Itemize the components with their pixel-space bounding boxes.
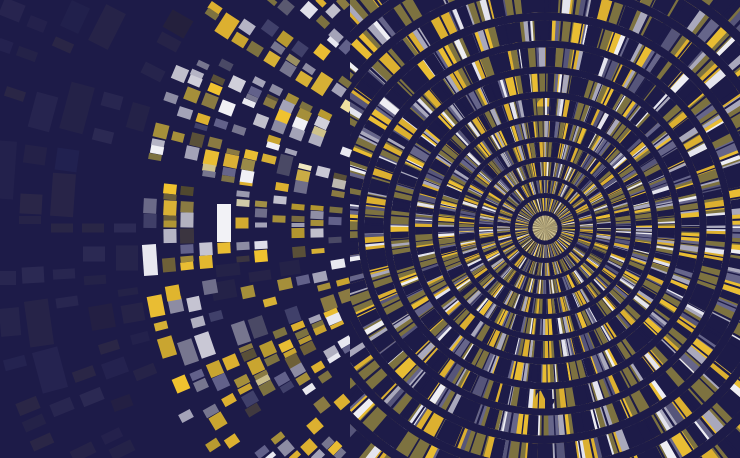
ring 10 xyxy=(319,2,740,454)
ring 8 xyxy=(374,57,716,399)
ring 4 xyxy=(466,150,624,306)
ring 11 xyxy=(350,0,740,458)
ring 5 xyxy=(446,129,644,327)
ring 7 xyxy=(400,82,690,374)
ring 6 xyxy=(424,106,666,350)
bright left segments xyxy=(142,0,356,458)
ring 9 xyxy=(348,30,740,426)
concentric segmented rings xyxy=(350,0,740,458)
ring 3 xyxy=(486,169,604,287)
faint outer segments xyxy=(0,0,301,458)
ring 2 xyxy=(504,186,586,270)
ring 1 xyxy=(522,204,568,252)
ring 12 xyxy=(350,0,740,458)
centre disc xyxy=(532,216,558,240)
